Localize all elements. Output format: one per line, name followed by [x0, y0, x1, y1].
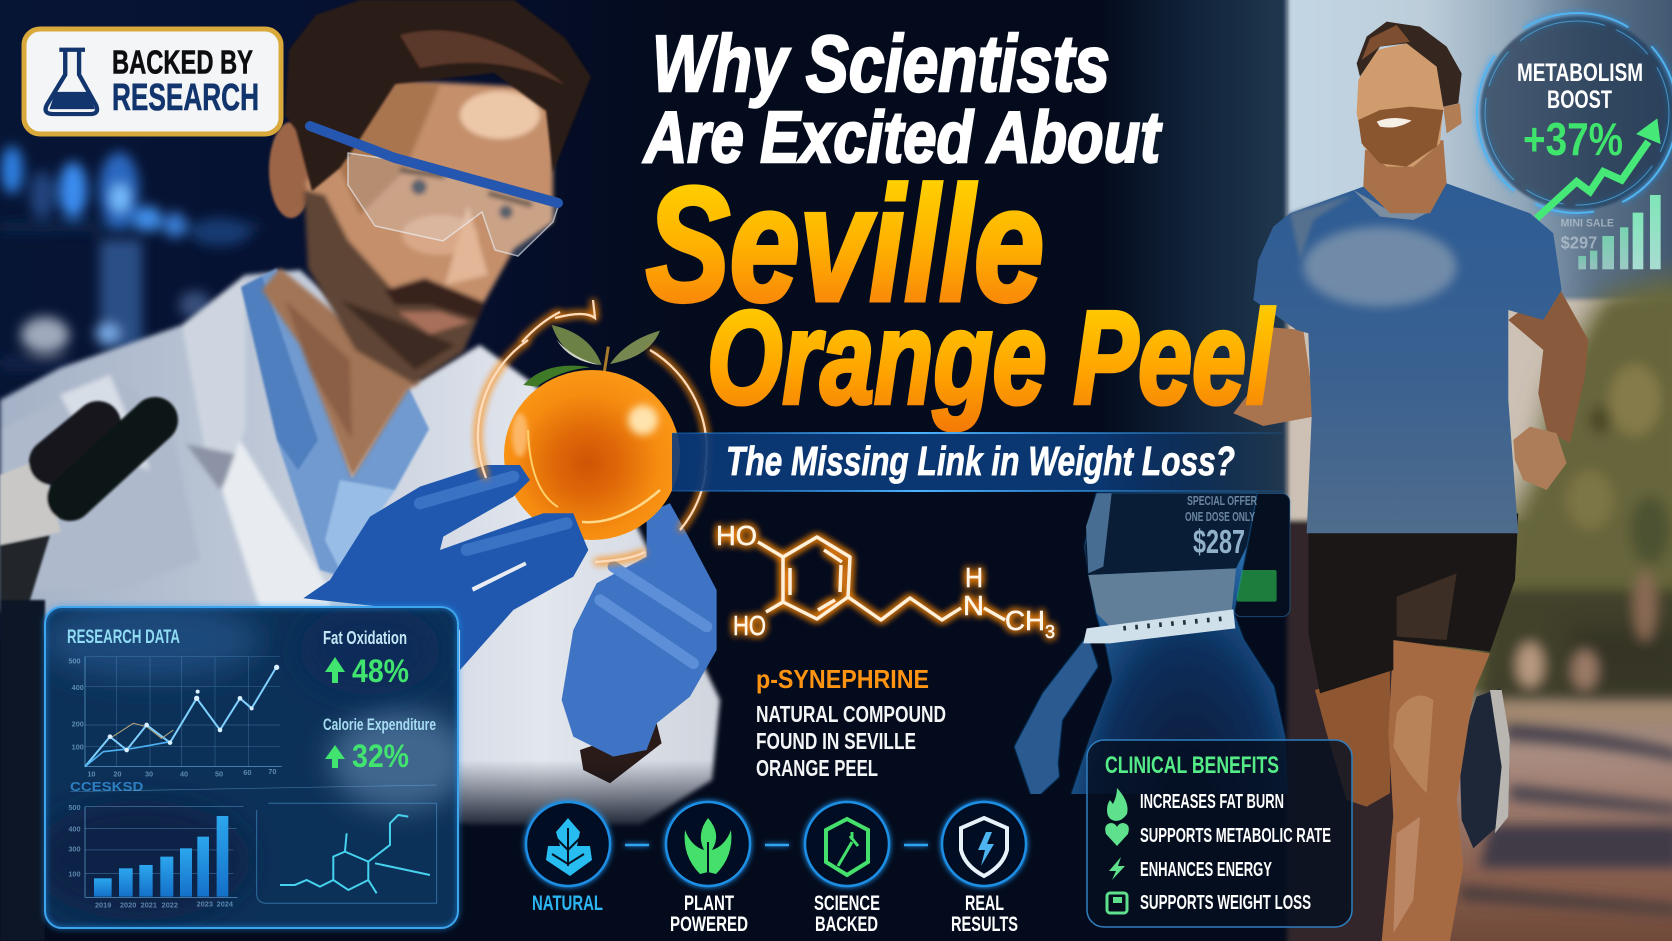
- bar chart: 2020: [120, 900, 136, 909]
- benefit: metabolic rate: [1105, 823, 1331, 847]
- line chart: 40: [180, 770, 188, 779]
- title white lines: [642, 19, 1163, 178]
- metabolism boost dial: [1477, 13, 1672, 269]
- panel glass with dark mottling: [30, 600, 470, 928]
- right arm and hand: [1508, 283, 1588, 490]
- stat: fat oxidation: 48%: [352, 653, 409, 689]
- bar chart: [68, 803, 243, 909]
- line chart: CCESKSD: [70, 779, 144, 794]
- p-synephrine molecule: H: [965, 562, 983, 593]
- hair: [285, 0, 591, 191]
- background: blurred olive trees: [1460, 270, 1672, 690]
- connectors: [625, 844, 928, 846]
- bar chart: 2024: [217, 900, 234, 909]
- p-synephrine molecule: HO: [733, 610, 766, 641]
- body silhouette: [1015, 493, 1292, 940]
- p-synephrine description: FOUND IN SEVILLE: [756, 728, 916, 754]
- head and hair: [1357, 22, 1462, 167]
- benefit: fat burn: [1107, 788, 1284, 821]
- price overlay text: $287: [1193, 523, 1245, 560]
- benefit: metabolic rate: SUPPORTS METABOLIC RATE: [1140, 825, 1331, 847]
- bar chart: 300: [68, 845, 81, 854]
- leaves: [523, 325, 660, 387]
- line chart: 70: [268, 767, 276, 776]
- icon labels: NATURAL: [532, 892, 603, 915]
- price overlay text: SPECIAL OFFER: [1187, 493, 1257, 508]
- p-synephrine molecule: HO: [716, 520, 757, 551]
- benefit: fat burn: INCREASES FAT BURN: [1140, 791, 1284, 813]
- badge: real results: [942, 802, 1026, 886]
- line chart: 400: [72, 683, 84, 692]
- front leg: [1382, 640, 1490, 941]
- t-shirt: [1253, 183, 1562, 533]
- p-synephrine description: NATURAL COMPOUND: [756, 701, 946, 727]
- back leg: [1315, 667, 1390, 807]
- background: runner scene sky: [1287, 0, 1672, 941]
- molecule mini panel: [257, 803, 437, 903]
- line chart: 20: [113, 770, 121, 779]
- bar chart: 100: [68, 870, 81, 879]
- title white lines: Why Scientists: [652, 19, 1110, 108]
- badge text: BACKED BY: [112, 44, 253, 80]
- line chart: 500: [68, 656, 81, 665]
- line chart: 30: [145, 770, 153, 779]
- title orange lines: Seville: [646, 154, 1044, 335]
- face: [304, 80, 553, 384]
- background: blurred lab shelves and bottles: [0, 146, 260, 368]
- badge: plant powered: [666, 802, 750, 886]
- line chart: 10: [87, 770, 95, 779]
- stat: calorie expenditure: 32%: [352, 738, 409, 774]
- title orange lines: [646, 154, 1275, 431]
- line chart: 60: [243, 768, 251, 777]
- dial text: BOOST: [1547, 86, 1612, 114]
- rising arrow: [1537, 118, 1661, 218]
- bar chart: 500: [68, 803, 81, 812]
- shoe: [1460, 688, 1510, 848]
- subtitle banner: [672, 432, 1282, 492]
- left arm and fist: [1233, 327, 1367, 426]
- dial bar chart: MINI SALE: [1561, 218, 1614, 230]
- dial bar chart: [1561, 195, 1661, 269]
- price overlay text: ONE DOSE ONLY: [1185, 509, 1255, 524]
- scientist photo: [0, 0, 758, 941]
- bar chart: 2021: [141, 900, 157, 909]
- dial bar chart: $297: [1561, 232, 1597, 252]
- line chart: 100: [72, 742, 84, 751]
- neck: [1363, 140, 1447, 213]
- coat fade at bottom: [458, 760, 758, 835]
- safety goggles: [310, 126, 558, 256]
- microscope: [0, 420, 155, 941]
- line chart: [68, 656, 437, 794]
- gloved hand left: [303, 465, 588, 670]
- stat: fat oxidation: [323, 628, 409, 689]
- badge: natural: [526, 802, 610, 886]
- backed by research badge: [24, 29, 281, 134]
- panel heading: CLINICAL BENEFITS: [1105, 752, 1279, 779]
- stat: calorie expenditure: Calorie Expenditure: [323, 715, 436, 734]
- measuring tape: [1083, 609, 1235, 643]
- orange halo ring: [478, 300, 707, 562]
- flask icon: [46, 50, 97, 114]
- badge text: [112, 44, 259, 119]
- bar chart: 2019: [95, 900, 111, 909]
- icon labels: RESULTS: [951, 913, 1018, 936]
- icon labels: REAL: [965, 892, 1004, 915]
- shorts: [1308, 513, 1518, 693]
- dial text: +37%: [1523, 113, 1623, 165]
- benefit: weight loss: SUPPORTS WEIGHT LOSS: [1140, 892, 1311, 914]
- benefit: weight loss: [1107, 892, 1311, 914]
- beard: [304, 190, 484, 384]
- line chart: 50: [215, 770, 223, 779]
- title white lines: Are Excited About: [642, 98, 1163, 178]
- p-synephrine description: p-SYNEPHRINE: [756, 664, 929, 694]
- orange fruit: [504, 325, 680, 540]
- benefit: energy: [1109, 857, 1272, 881]
- price overlay text: [1185, 493, 1257, 560]
- badge: science backed: [805, 802, 889, 886]
- p-synephrine molecule: CH: [1005, 605, 1045, 636]
- panel heading: RESEARCH DATA: [67, 627, 180, 648]
- icon labels: SCIENCE: [814, 892, 880, 915]
- p-synephrine description: [756, 664, 946, 781]
- ear: [269, 122, 313, 218]
- title orange lines: Orange Peel: [707, 284, 1275, 431]
- dial text: [1517, 59, 1643, 165]
- p-synephrine molecule: 3: [1045, 622, 1055, 642]
- gloved hand right: [562, 503, 717, 783]
- stat: fat oxidation: Fat Oxidation: [323, 628, 407, 648]
- bar chart: 2022: [162, 900, 178, 909]
- bar chart: 400: [68, 825, 81, 834]
- side interface panel: [1233, 493, 1290, 617]
- stat: calorie expenditure: [323, 715, 436, 774]
- research data panel: [30, 600, 470, 928]
- benefit: energy: ENHANCES ENERGY: [1140, 859, 1272, 881]
- line chart: 200: [72, 720, 84, 729]
- background: tree canopy detail: [1505, 295, 1672, 600]
- badge text: RESEARCH: [112, 77, 259, 119]
- dial rings: [1477, 13, 1672, 213]
- neck: [262, 268, 420, 478]
- p-synephrine molecule: N: [963, 590, 984, 621]
- icon labels: PLANT: [684, 892, 734, 915]
- shirt and collar: [241, 268, 429, 575]
- icon labels: BACKED: [815, 913, 878, 936]
- icon labels: [532, 892, 1018, 936]
- p-synephrine molecule: [716, 520, 1055, 642]
- background: road detail: [1460, 569, 1672, 915]
- runner photo: [1233, 22, 1588, 941]
- hologram waist figure: [1015, 493, 1292, 940]
- top garment and midriff: [1085, 493, 1257, 627]
- title: [642, 19, 1275, 431]
- bar chart: 2023: [197, 900, 213, 909]
- icon labels: POWERED: [670, 913, 748, 936]
- p-synephrine description: ORANGE PEEL: [756, 755, 878, 781]
- clinical benefits panel: [1087, 740, 1352, 927]
- subtitle banner: The Missing Link in Weight Loss?: [726, 438, 1235, 484]
- feature icon row: [526, 802, 1026, 936]
- lab coat: [0, 270, 720, 825]
